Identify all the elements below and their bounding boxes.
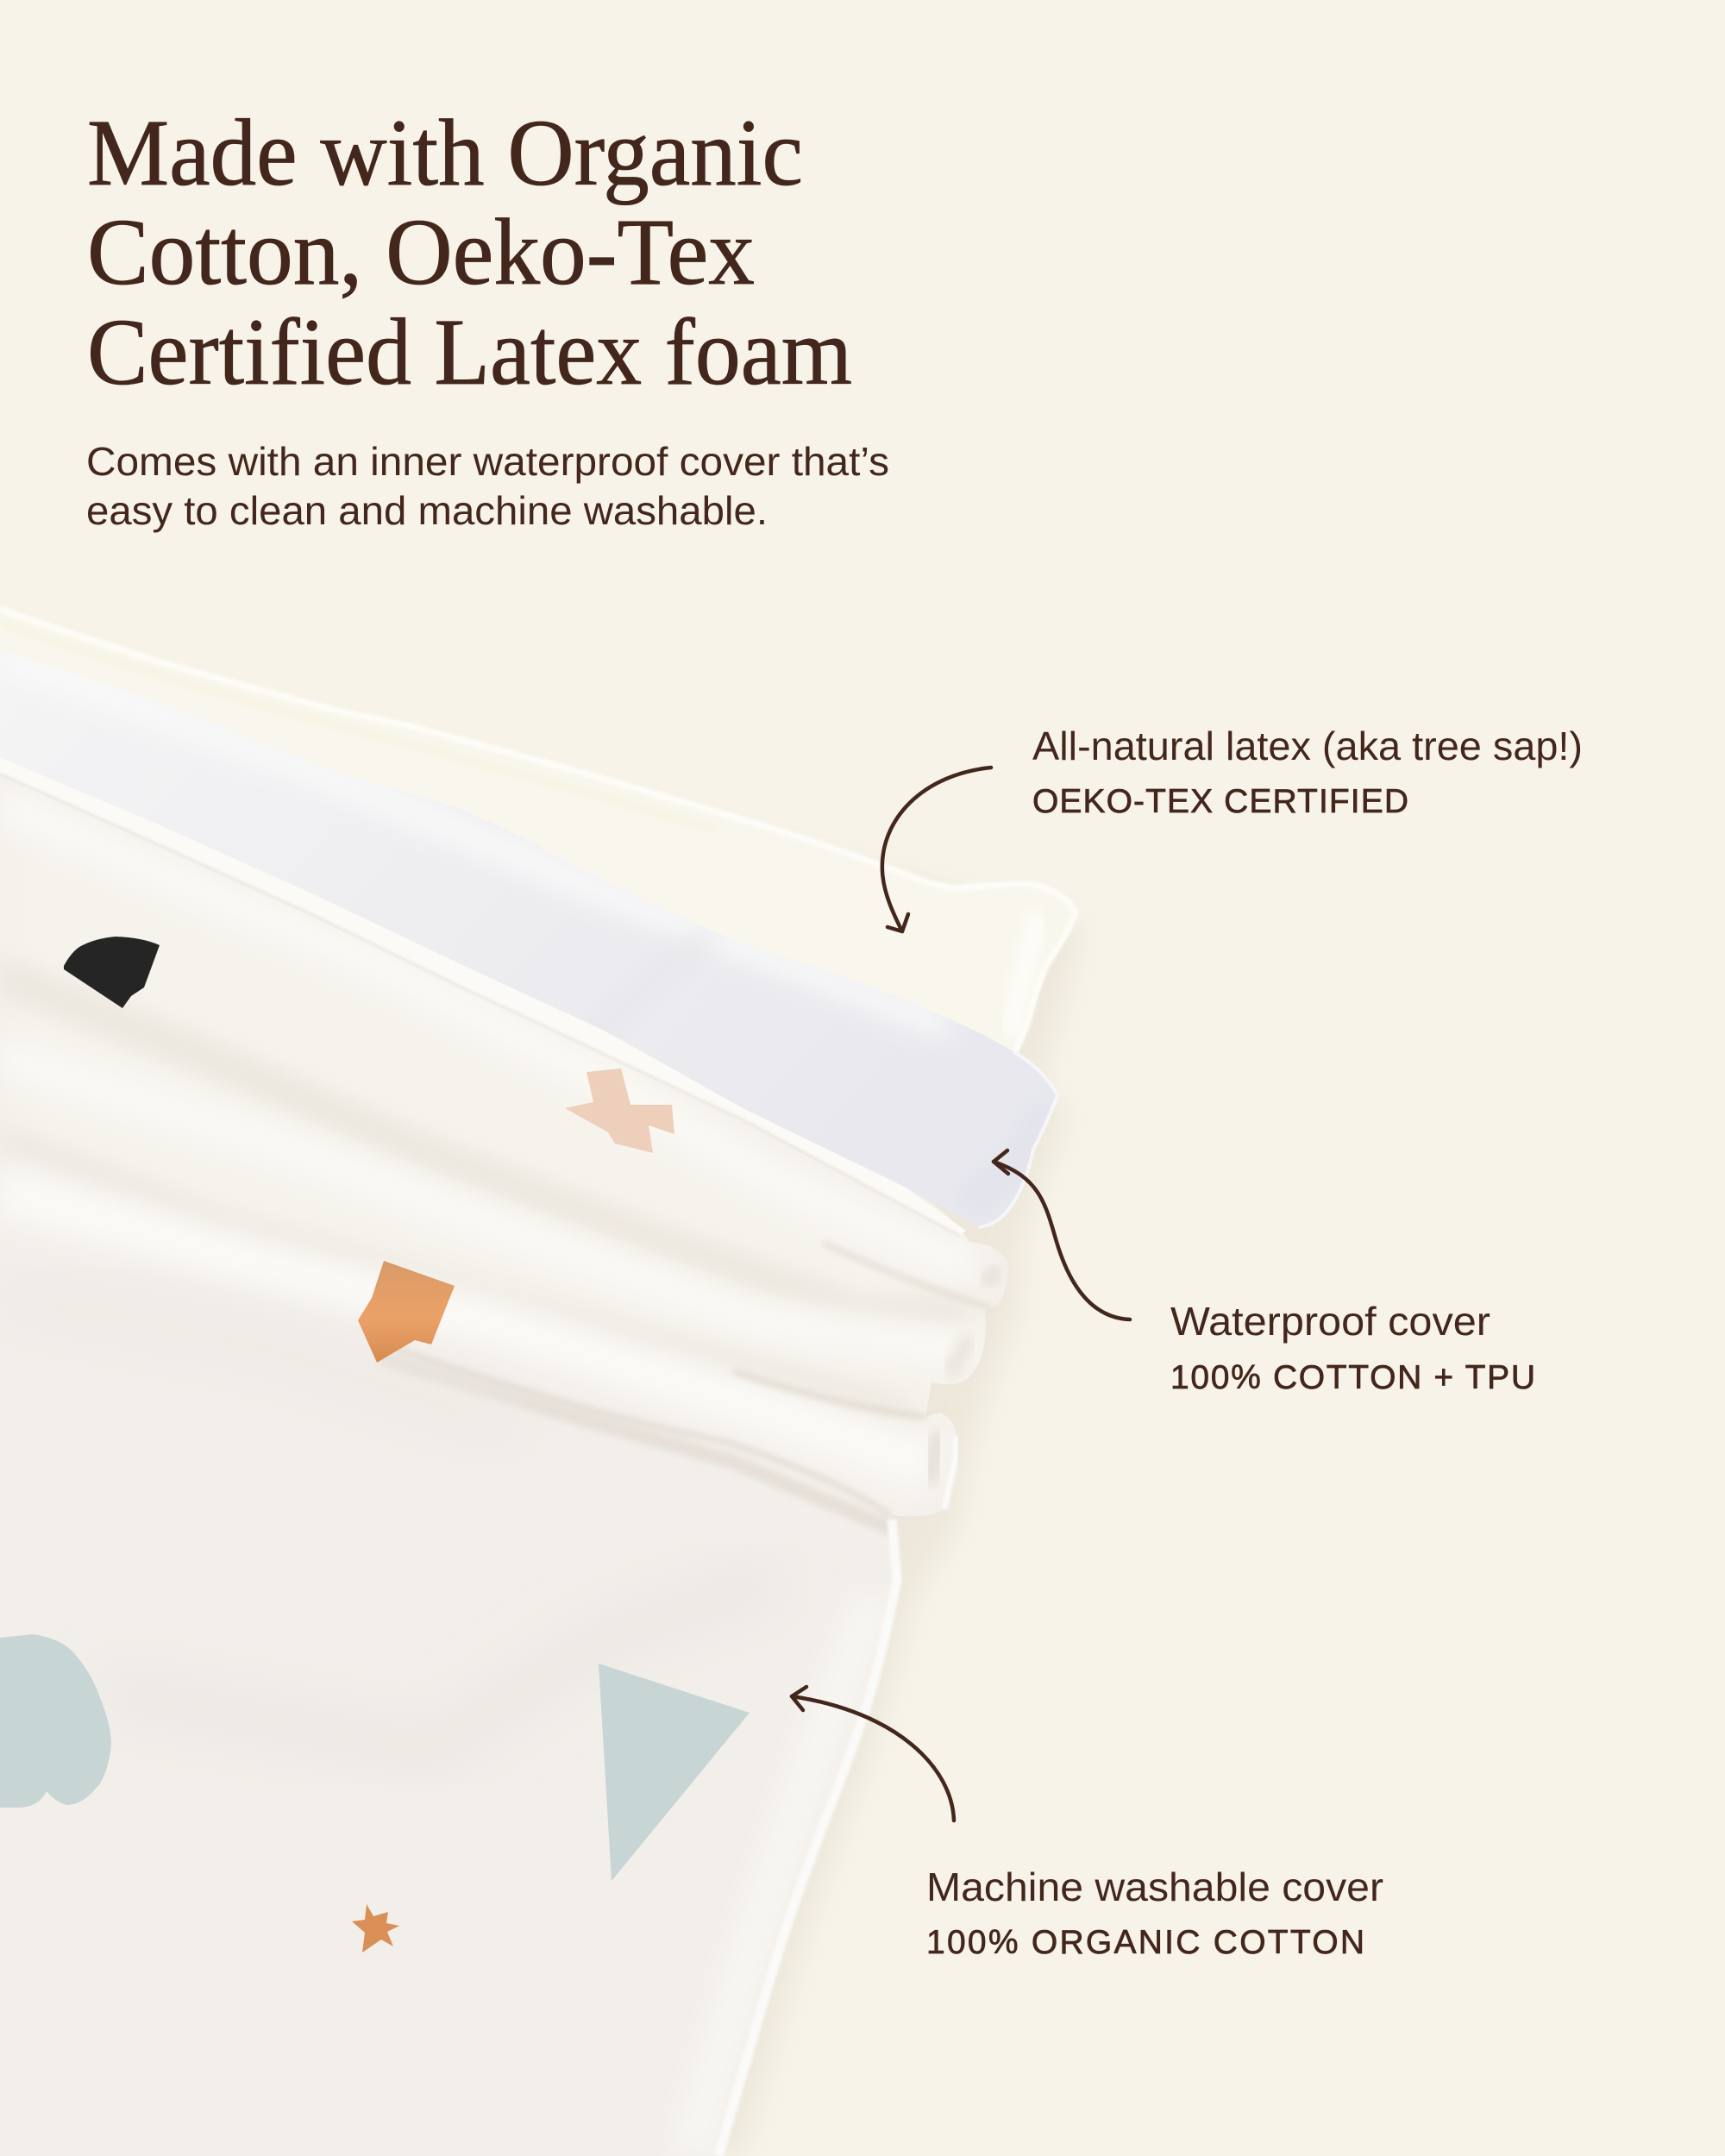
- label: machine washable cover: 100% ORGANIC COTTON: [926, 1924, 1364, 1961]
- label: waterproof cover: Waterproof cover: [1170, 1299, 1490, 1344]
- print: black half circle: [64, 937, 160, 1008]
- hem band along the top edge: [0, 757, 966, 1236]
- label: machine washable cover: Machine washable cover: [926, 1865, 1383, 1909]
- title: Made with Organic: [87, 100, 803, 205]
- title: Cotton, Oeko-Tex: [87, 199, 755, 304]
- label: latex: [1032, 724, 1583, 820]
- arrow: latex: [882, 768, 991, 931]
- print: orange star: [352, 1904, 399, 1952]
- label: latex: OEKO-TEX CERTIFIED: [1032, 783, 1408, 820]
- print: pink cross: [565, 1069, 674, 1153]
- subtitle text: [86, 439, 889, 533]
- photo: layered mattress: [0, 606, 1082, 2156]
- organic cotton cover: [0, 757, 1008, 2156]
- fold crease lines: [823, 1243, 992, 1308]
- print: teal triangle: [599, 1664, 750, 1881]
- under fold shadow: [380, 1358, 897, 1531]
- bright band upper: [0, 802, 975, 1268]
- soft drop shadow: [0, 655, 1082, 2156]
- foam white edge: [0, 609, 1076, 1056]
- subtitle text: Comes with an inner waterproof cover that’s: [86, 439, 889, 484]
- subtitle text: easy to clean and machine washable.: [86, 488, 768, 533]
- label: machine washable cover: [926, 1865, 1383, 1961]
- lobe ends: [983, 1268, 999, 1285]
- upper fabric wash: [0, 776, 992, 1526]
- label: latex: All-natural latex (aka tree sap!): [1032, 724, 1583, 768]
- title: Certified Latex foam: [87, 299, 852, 404]
- label: waterproof cover: 100% COTTON + TPU: [1170, 1359, 1535, 1396]
- print: teal blob: [0, 1634, 111, 1808]
- print: orange shape: [358, 1261, 455, 1363]
- bright fold 3: [0, 1190, 932, 1466]
- arrow: waterproof cover: [994, 1150, 1130, 1319]
- piping along the bottom edge: [718, 1520, 897, 2156]
- fold shadow 2: [0, 1138, 914, 1414]
- lower cloth: [104, 1578, 776, 1751]
- title: [87, 100, 852, 404]
- label: waterproof cover: [1170, 1299, 1535, 1396]
- arrow: machine washable cover: [792, 1687, 954, 1821]
- fold shadow 1: [0, 975, 966, 1315]
- latex foam layer: [0, 606, 1078, 1121]
- bright fold: [0, 1056, 975, 1350]
- waterproof cover layer: [0, 649, 1057, 1227]
